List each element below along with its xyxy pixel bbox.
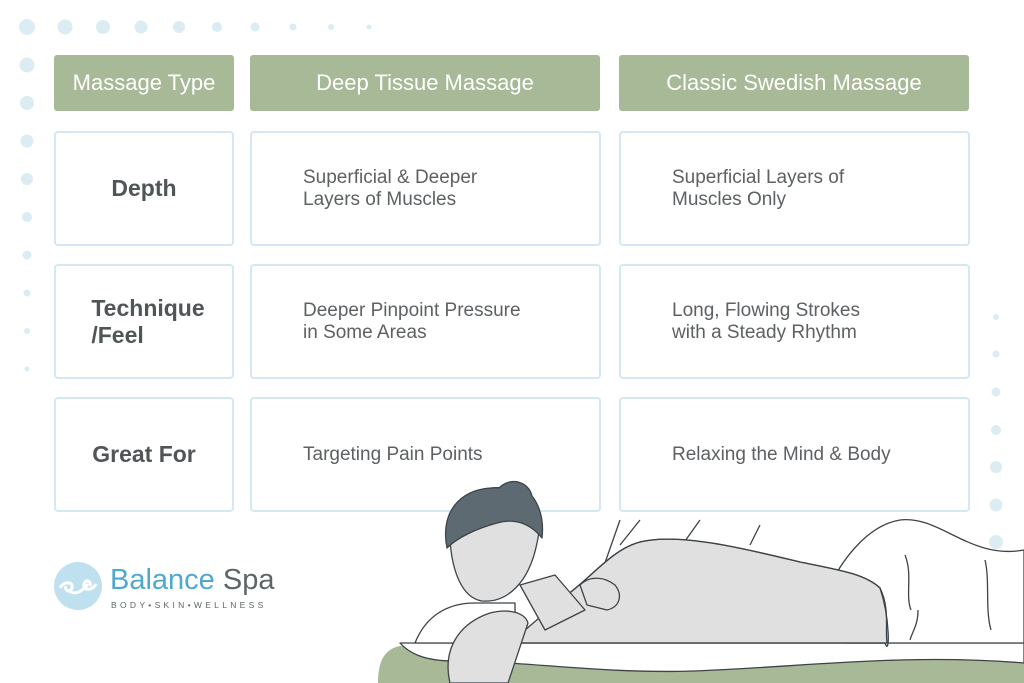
header: Deep Tissue Massage (250, 55, 600, 111)
back (510, 539, 888, 646)
cell: swedish great for: Relaxing the Mind & Body (672, 444, 891, 464)
row label: Technique/Feel: Technique (91, 294, 205, 320)
hand (580, 578, 619, 610)
cell: deep depth (250, 131, 601, 246)
arm under head (448, 611, 528, 683)
hair (446, 482, 543, 548)
cell: deep technique: Deeper Pinpoint Pressure (303, 300, 521, 320)
cell: deep technique: in Some Areas (303, 322, 427, 342)
logo text: Balance Spa (110, 564, 274, 596)
cell: deep depth: Superficial & Deeper (303, 166, 477, 188)
white sheet on bed (400, 643, 1024, 671)
cell: swedish depth (619, 131, 970, 246)
header: Classic Swedish Massage: Classic Swedish Massage (666, 70, 922, 95)
header: Massage Type (54, 55, 234, 111)
pillow (415, 603, 515, 643)
header: Massage Type: Massage Type (73, 70, 215, 95)
row label: Depth (54, 131, 234, 246)
neck/shoulder (520, 575, 585, 630)
cell: swedish technique: with a Steady Rhythm (672, 322, 857, 342)
row label: Technique/Feel (54, 264, 234, 379)
cell: deep great for (250, 397, 601, 512)
logo: Balance Spa: BODY•SKIN•WELLNESS (111, 600, 267, 610)
cell: deep technique (250, 264, 601, 379)
row label: Technique/Feel: /Feel (91, 322, 144, 348)
towel over hips (830, 520, 1024, 643)
header: Deep Tissue Massage: Deep Tissue Massage (316, 70, 534, 95)
row label: Great For: Great For (92, 441, 196, 467)
green bed base (378, 645, 1024, 683)
cell: swedish depth: Superficial Layers of (672, 166, 844, 188)
cell: deep great for: Targeting Pain Points (303, 444, 483, 464)
cell: swedish great for (619, 397, 970, 512)
cell: swedish technique: Long, Flowing Strokes (672, 300, 860, 320)
logo: Balance Spa (54, 562, 274, 610)
therapist lines (592, 520, 760, 600)
cell: deep depth: Layers of Muscles (303, 188, 456, 210)
cell: swedish technique (619, 264, 970, 379)
row label: Depth: Depth (111, 175, 177, 201)
icon: logo circle (54, 562, 102, 610)
face (449, 488, 539, 601)
row label: Great For (54, 397, 234, 512)
cell: swedish depth: Muscles Only (672, 188, 786, 210)
header: Classic Swedish Massage (619, 55, 969, 111)
